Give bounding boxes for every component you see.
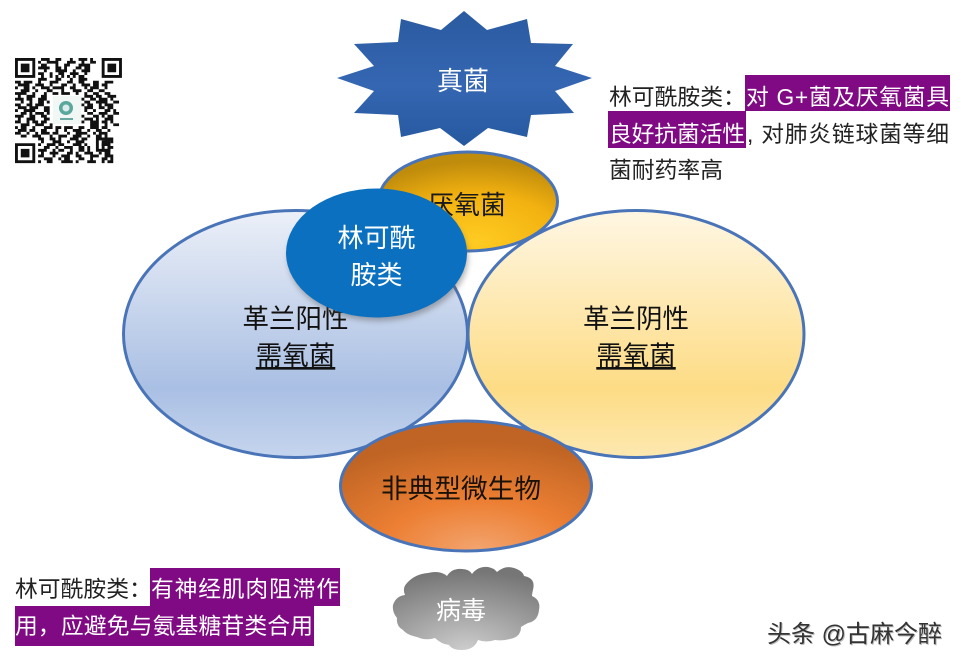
- icon: QR code: [12, 55, 125, 166]
- callout: lincosamide spectrum note: 良好抗菌活性: [609, 121, 745, 147]
- ellipse: atypical microorganisms: [340, 421, 592, 551]
- label: atypical microorganisms: 非典型微生物: [381, 474, 541, 504]
- label: gram-negative aerobes: 需氧菌: [596, 341, 676, 371]
- ellipse: lincosamides: [286, 188, 468, 321]
- callout: lincosamide spectrum note: 菌耐药率高: [609, 157, 723, 183]
- callout: lincosamide spectrum note: 对 G+菌及厌氧菌具: [746, 84, 949, 110]
- shape: fungi star: [337, 11, 592, 146]
- label: gram-negative aerobes: 革兰阴性: [583, 304, 689, 334]
- label: lincosamides: 胺类: [350, 260, 403, 290]
- icon: virus cloud: [393, 567, 539, 650]
- watermark: 头条 @古麻今醉: [768, 622, 943, 649]
- callout: lincosamide adverse effect note: 用，应避免与氨基糖苷类合用: [15, 613, 313, 639]
- callout: lincosamide adverse effect note: [15, 568, 340, 646]
- callout: lincosamide spectrum note: 林可酰胺类：: [609, 84, 746, 110]
- callout: lincosamide adverse effect note: 有神经肌肉阻滞作: [151, 576, 339, 602]
- ellipse: gram-positive aerobes: [124, 210, 468, 458]
- icon: QR centre logo: [53, 96, 81, 124]
- watermark: 头条 @古麻今醉: [767, 621, 942, 648]
- callout: lincosamide adverse effect note: 林可酰胺类：: [15, 576, 152, 602]
- label: anaerobes: 厌氧菌: [428, 190, 506, 220]
- callout: lincosamide spectrum note: , 对肺炎链球菌等细: [747, 121, 949, 147]
- label: gram-positive aerobes: 需氧菌: [256, 341, 335, 371]
- callout: lincosamide spectrum note: [608, 75, 950, 183]
- label: fungi: 真菌: [437, 66, 489, 96]
- label: lincosamides: 林可酰: [337, 223, 416, 253]
- label: gram-positive aerobes: 革兰阳性: [242, 304, 348, 334]
- label: virus: 病毒: [436, 597, 486, 625]
- ellipse: anaerobes: [378, 152, 558, 251]
- ellipse: gram-negative aerobes: [468, 210, 804, 458]
